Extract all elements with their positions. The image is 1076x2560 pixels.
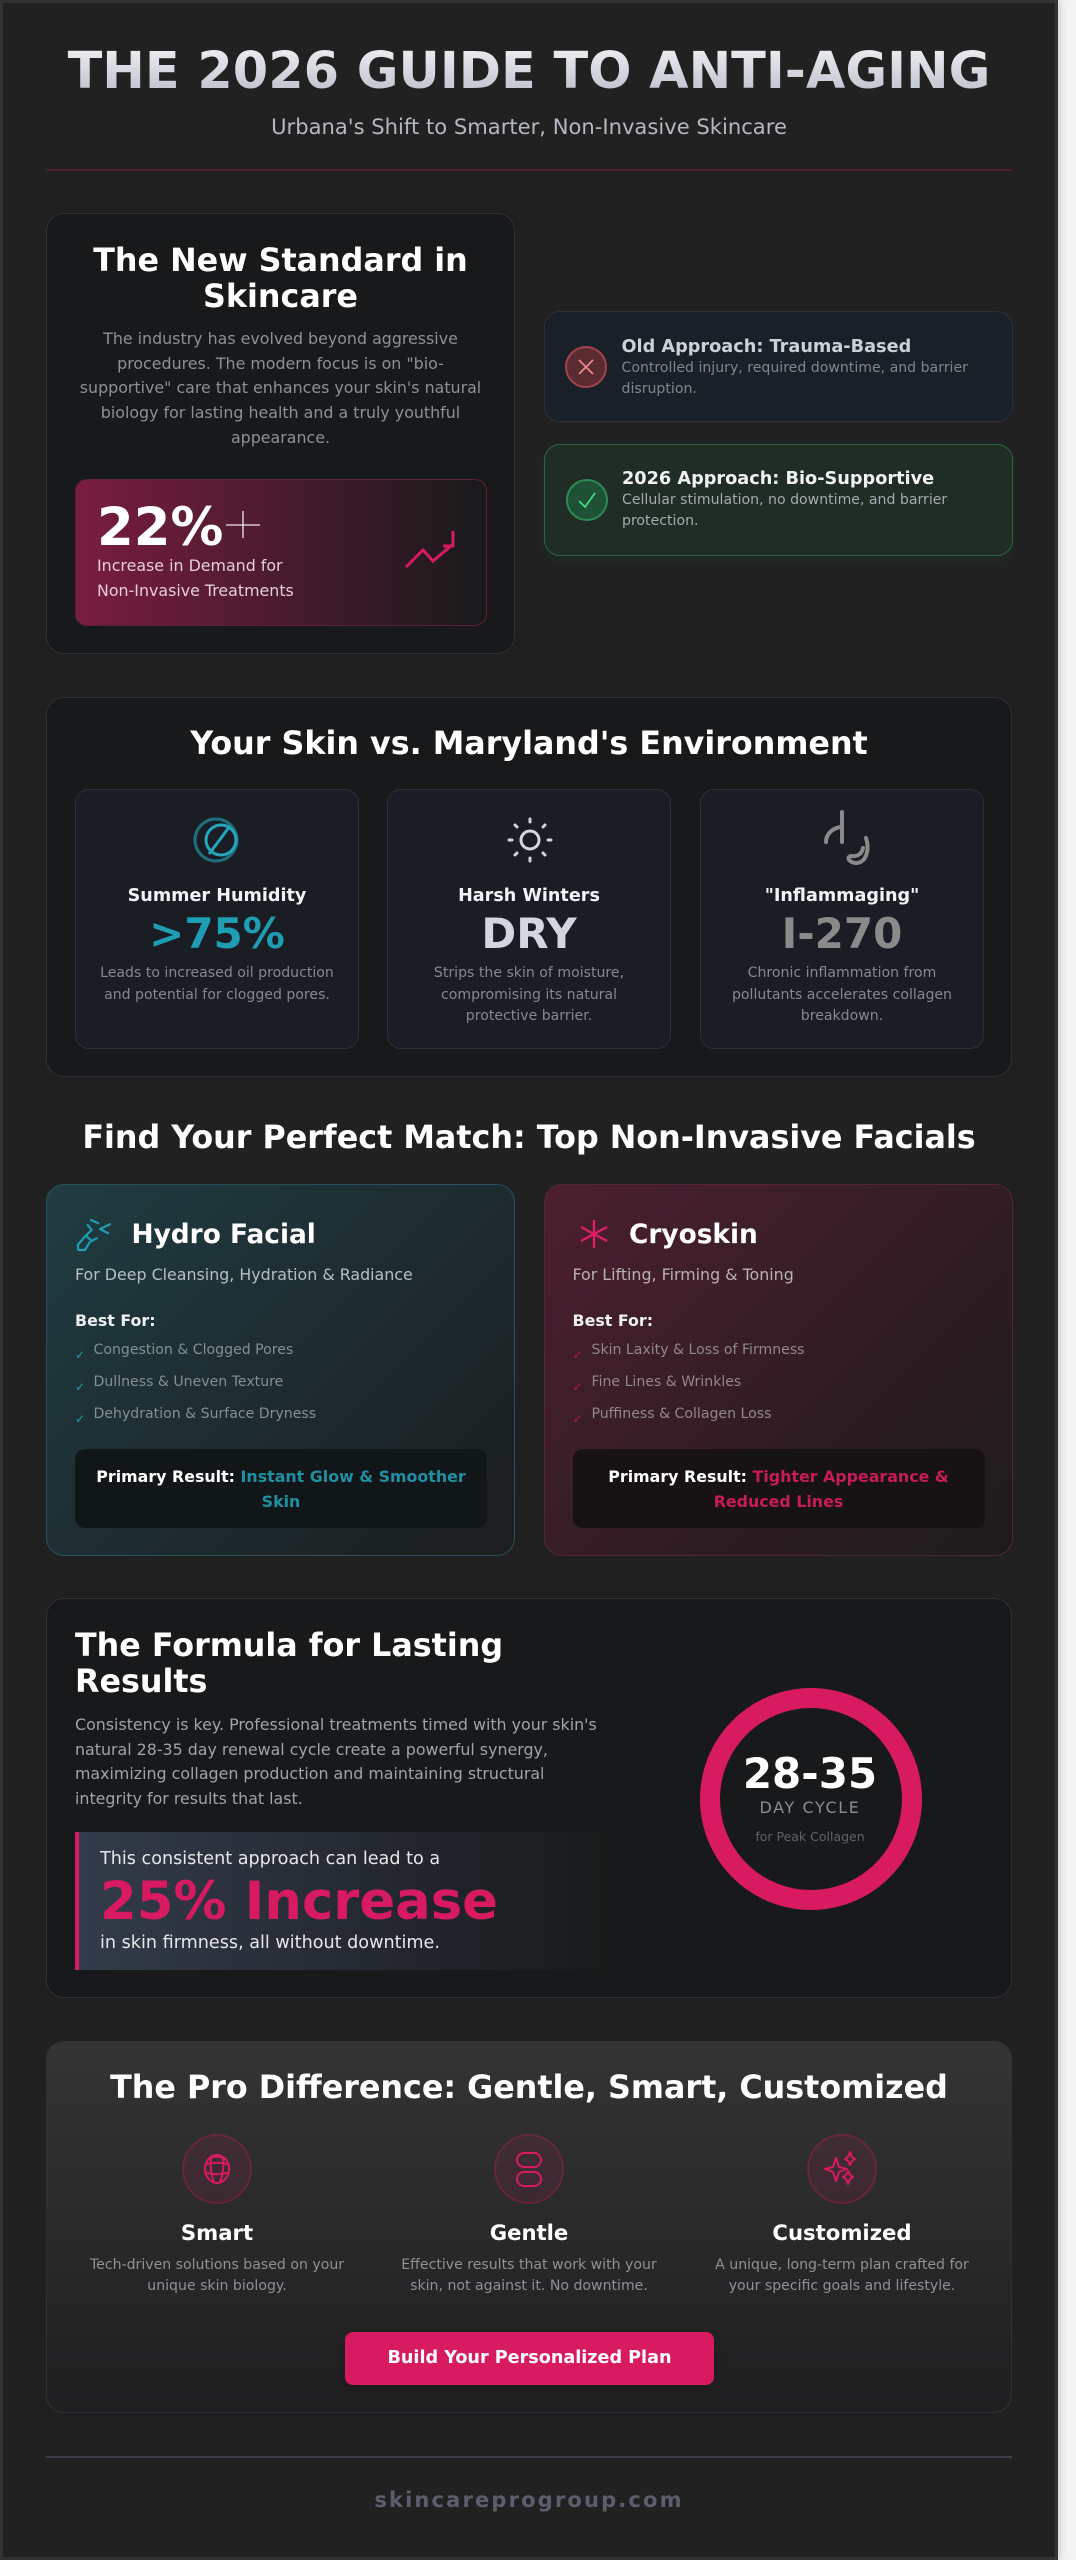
list: ✓ [75,1412,85,1426]
stat plus [226,511,260,538]
title: Summer Humidity [128,886,306,906]
primary result: Skin [262,1492,300,1511]
2026 approach text [622,492,948,529]
list: Puffiness & Collagen Loss [592,1406,771,1422]
heading: formula: Results [75,1664,207,1700]
description: Strips the skin of moisture, [434,965,624,981]
icon: check mark [566,479,608,521]
title: Customized [772,2220,912,2245]
heading: facials: Find Your Perfect Match: Top Non-Invasive Facials [82,1120,976,1156]
button: personalized plan: Build Your Personalized Plan [388,2348,672,2368]
description: breakdown. [801,1008,883,1024]
description [732,965,952,1024]
icon: sparkles [807,2134,877,2204]
button: personalized plan [345,2332,714,2385]
chart: day cycle ring [700,1688,922,1910]
subtitle: For Lifting, Firming & Toning [572,1265,794,1284]
best for: Best For: [75,1311,156,1330]
panel: environment [46,697,1012,1077]
callout: 25% increase [75,1832,610,1970]
primary result: Primary Result: Instant Glow & Smoother [96,1467,466,1486]
description: and potential for clogged pores. [104,987,330,1003]
description [401,2257,657,2294]
description: A unique, long-term plan crafted for [715,2257,969,2273]
column: gentle [401,2134,657,2294]
list: ✓ [572,1380,583,1394]
description [100,965,334,1003]
card: 2026 approach [544,444,1012,556]
old approach text: Controlled injury, required downtime, and barrier [622,360,968,376]
description: Leads to increased oil production [100,965,334,981]
callout intro: This consistent approach can lead to a [100,1849,440,1869]
list: Fine Lines & Wrinkles [592,1374,741,1390]
icon: x mark [565,346,607,388]
ring label: DAY CYCLE [760,1798,860,1816]
title: Cryoskin [629,1219,758,1250]
description: protective barrier. [466,1008,592,1024]
intro paragraph: procedures. The modern focus is on "bio- [117,354,444,373]
description [434,965,624,1024]
heading: formula: The Formula for Lasting [75,1628,503,1664]
ring number: 28-35 [743,1749,877,1798]
description: Tech-driven solutions based on your [90,2257,344,2273]
icon: globe [182,2134,252,2204]
stat value: 22% [97,497,223,558]
icon: sun [508,818,552,862]
title: Hydro Facial [132,1219,316,1250]
panel: the new standard [46,213,515,654]
old approach text: disruption. [622,381,697,397]
description: pollutants accelerates collagen [732,987,952,1003]
primary result: Primary Result: Tighter Appearance & [608,1467,949,1486]
card: summer humidity [75,789,359,1049]
panel: formula [46,1598,1012,1998]
card: hydro facial [46,1184,515,1556]
value: I-270 [782,909,902,958]
icon: snowflake [580,1220,608,1248]
paragraph [75,1715,597,1808]
primary result [572,1449,984,1528]
heading: pro difference: The Pro Difference: Gentle, Smart, Customized [110,2070,948,2106]
callout value: 25% Increase [100,1871,498,1932]
list: ✓ [572,1348,583,1362]
column: customized [715,2134,969,2294]
title: Gentle [490,2220,568,2245]
icon: hydro wand [76,1218,112,1252]
description [90,2257,344,2294]
subtitle: Urbana's Shift to Smarter, Non-Invasive Skincare [271,114,787,139]
card: cryoskin [544,1184,1012,1556]
stat label: Increase in Demand for [97,556,283,575]
title: Harsh Winters [458,886,600,906]
heading: environment: Your Skin vs. Maryland's Environment [190,726,868,762]
stat box: 22% demand [75,479,487,626]
list [75,1342,316,1426]
description: compromising its natural [441,987,617,1003]
list: Dullness & Uneven Texture [94,1374,283,1390]
list: ✓ [75,1348,85,1362]
icon: pollution [824,810,870,865]
old approach text [622,360,968,397]
intro paragraph: biology for lasting health and a truly youthful [101,403,460,422]
intro paragraph: appearance. [231,428,330,447]
card: harsh winters [387,789,671,1049]
list [572,1342,805,1426]
panel: pro difference [46,2041,1012,2413]
2026 approach text: protection. [622,513,698,529]
2026 approach title: 2026 Approach: Bio-Supportive [622,469,934,489]
description: Effective results that work with your [401,2257,657,2273]
intro paragraph: The industry has evolved beyond aggressive [103,329,458,348]
list: Dehydration & Surface Dryness [94,1406,316,1422]
title: Smart [181,2220,253,2245]
subtitle: For Deep Cleansing, Hydration & Radiance [75,1265,413,1284]
list: Congestion & Clogged Pores [94,1342,293,1358]
footer url: skincareprogroup.com [374,2487,684,2512]
list: ✓ [75,1380,85,1394]
description: unique skin biology. [147,2278,287,2294]
description: Chronic inflammation from [748,965,936,981]
primary result [75,1449,487,1528]
title: THE 2026 GUIDE TO ANTI-AGING [68,42,990,101]
description [715,2257,969,2294]
icon: humidity [194,818,238,862]
icon: trend up [405,531,454,568]
paragraph: maximizing collagen production and maintaining structural [75,1764,544,1783]
ring note: for Peak Collagen [755,1828,865,1844]
paragraph: natural 28-35 day renewal cycle create a powerful synergy, [75,1740,548,1759]
description: skin, not against it. No downtime. [410,2278,648,2294]
list: ✓ [572,1412,583,1426]
heading: new standard [93,243,468,315]
intro paragraph: supportive" care that enhances your skin's natural [80,378,481,397]
value: DRY [481,909,577,958]
list: Skin Laxity & Loss of Firmness [592,1342,805,1358]
heading: formula [75,1628,503,1700]
heading: new standard: Skincare [203,279,358,315]
heading: new standard: The New Standard in [93,243,468,279]
description: your specific goals and lifestyle. [729,2278,955,2294]
stat label [97,556,294,600]
stat label: Non-Invasive Treatments [97,580,294,600]
card: old approach [544,311,1012,422]
column: smart [90,2134,344,2294]
intro paragraph [80,329,481,447]
2026 approach text: Cellular stimulation, no downtime, and barrier [622,492,947,508]
paragraph: integrity for results that last. [75,1789,303,1808]
icon: layers [494,2134,564,2204]
primary result: Reduced Lines [714,1492,843,1511]
card: inflammaging [700,789,984,1049]
best for: Best For: [572,1311,653,1330]
paragraph: Consistency is key. Professional treatments timed with your skin's [75,1715,597,1734]
callout outro: in skin firmness, all without downtime. [100,1933,440,1953]
value: >75% [149,909,285,958]
title: "Inflammaging" [765,886,919,906]
old approach title: Old Approach: Trauma-Based [622,337,911,357]
